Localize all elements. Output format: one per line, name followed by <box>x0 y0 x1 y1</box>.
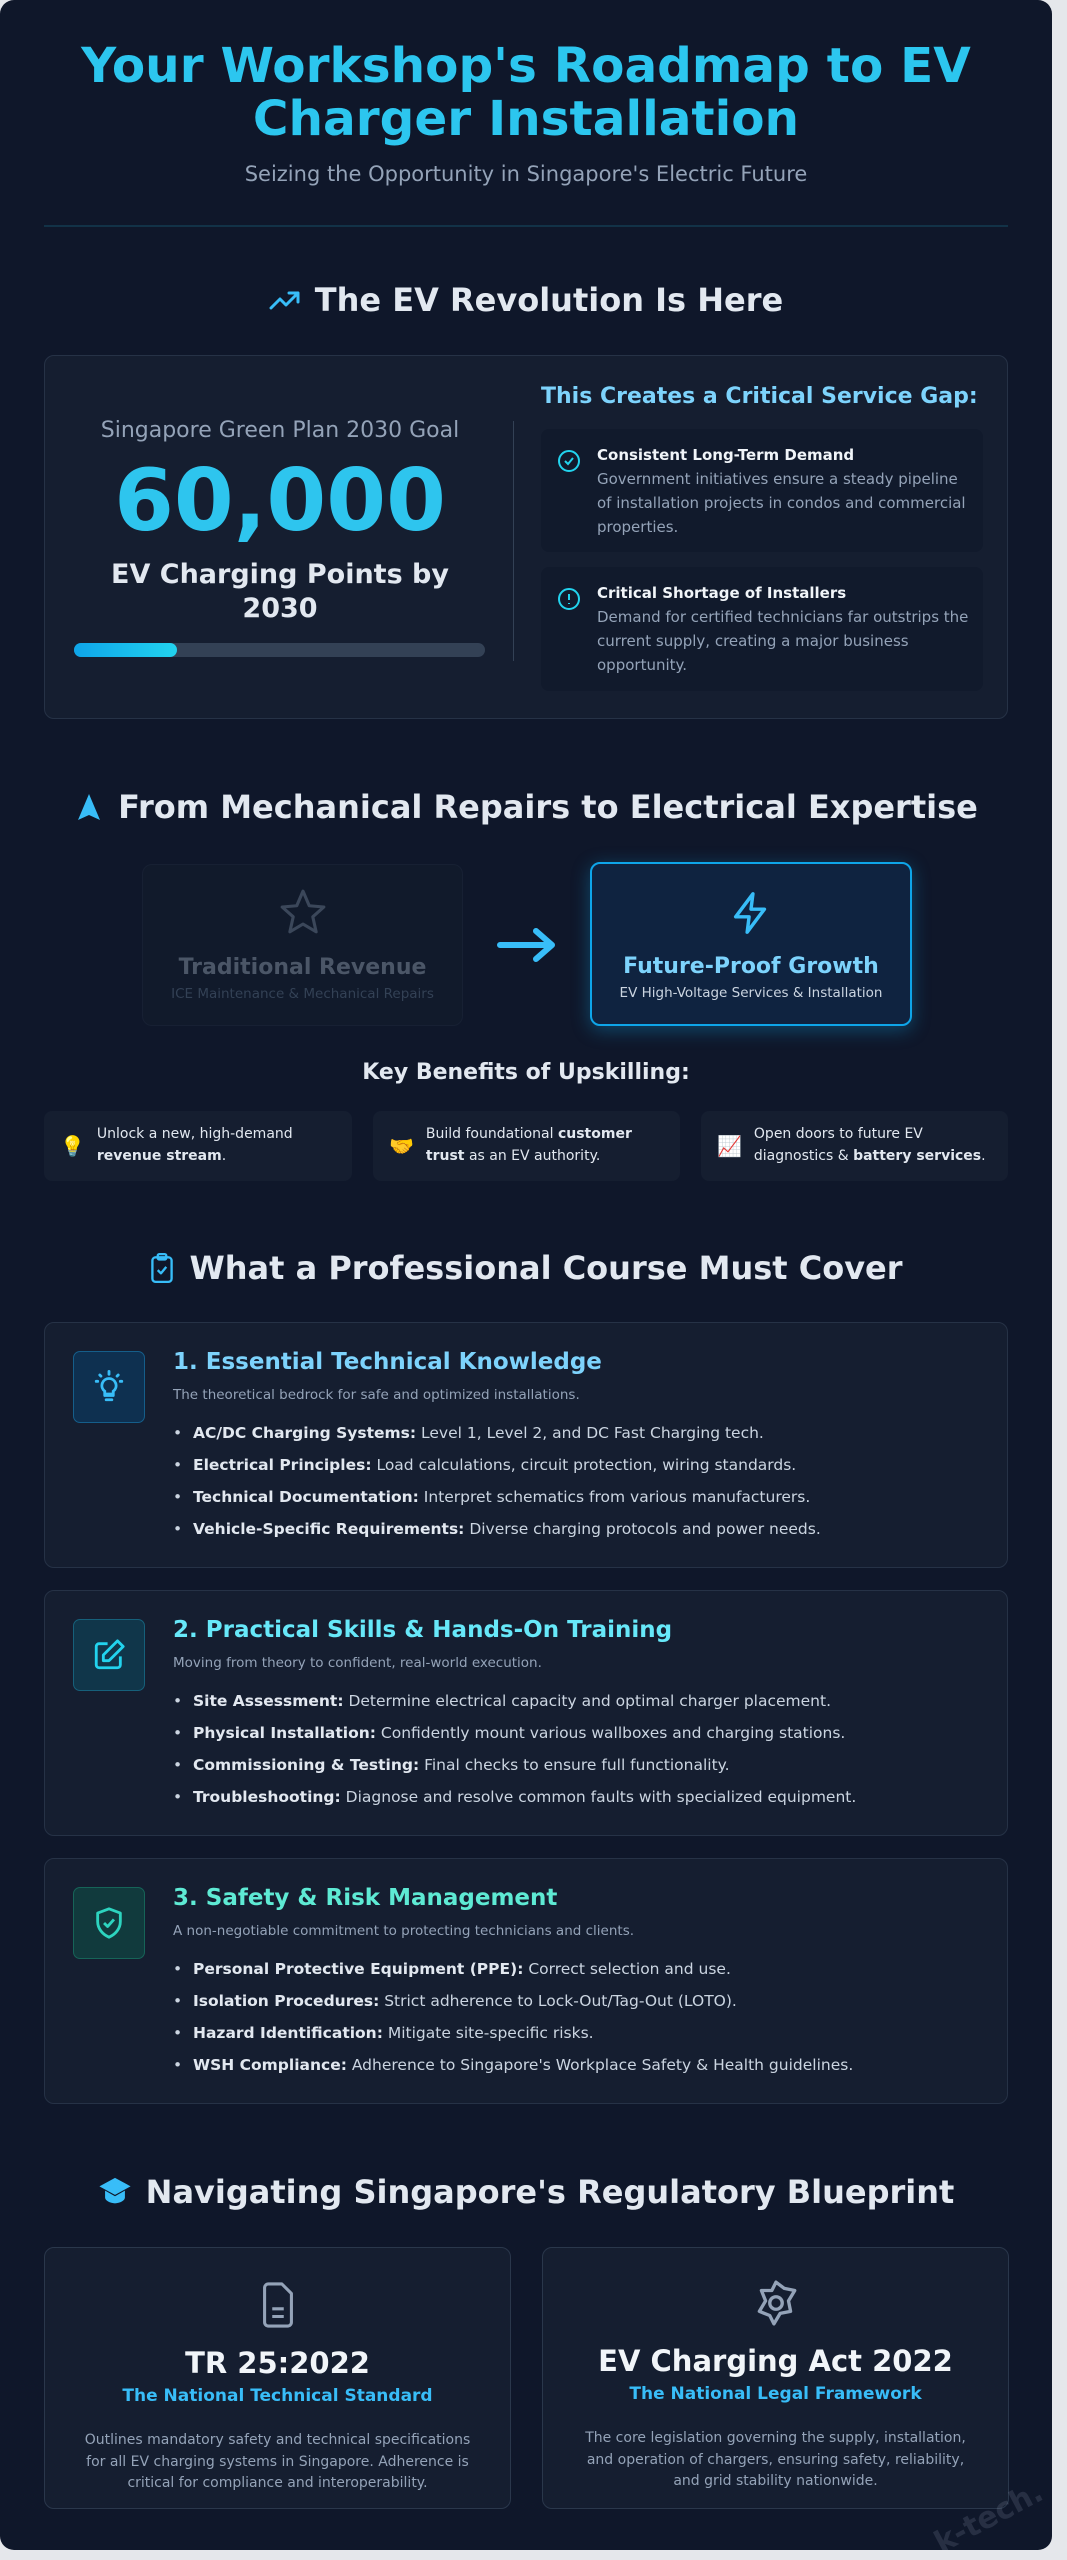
stat caption: EV Charging Points by <box>111 559 449 590</box>
card: traditional revenue: ICE Maintenance & Mechanical Repairs <box>171 986 434 1002</box>
course card 1: 1. Essential Technical Knowledge <box>173 1349 602 1375</box>
icon: document <box>263 2282 293 2328</box>
course card 2: Physical Installation: Confidently mount various wallboxes and charging stations. <box>193 1724 845 1742</box>
benefit: revenue: Unlock a new, high-demand revenue stream. <box>97 1126 293 1164</box>
benefit: trust: Build foundational customer trust as an EV authority. <box>426 1126 632 1164</box>
benefit: trust <box>373 1111 680 1181</box>
course card 2: 2. Practical Skills & Hands-On Training <box>173 1617 672 1643</box>
course card 1: AC/DC Charging Systems: Level 1, Level 2, and DC Fast Charging tech. <box>193 1424 764 1442</box>
card: traditional revenue: Traditional Revenue <box>179 955 426 980</box>
title: Charger Installation <box>253 91 799 147</box>
stat caption <box>111 559 449 624</box>
course card 1: Electrical Principles: Load calculations, circuit protection, wiring standards. <box>193 1456 796 1474</box>
stat label: Singapore Green Plan 2030 Goal <box>101 418 459 443</box>
stat caption: 2030 <box>242 593 318 624</box>
icon: bulb <box>73 1351 145 1423</box>
icon: seal <box>758 2280 796 2326</box>
reg card: TR 25 <box>44 2247 511 2509</box>
reg card: TR 25: The National Technical Standard <box>122 2386 433 2406</box>
benefit: trust: 🤝 <box>389 1134 414 1158</box>
card: traditional revenue <box>142 864 463 1026</box>
reg card: EV Charging Act: EV Charging Act 2022 <box>598 2344 953 2378</box>
arrow <box>497 928 555 962</box>
card: future-proof growth: EV High-Voltage Services & Installation <box>620 985 882 1001</box>
title <box>80 38 971 147</box>
progress bar <box>74 643 485 657</box>
benefit: revenue <box>44 1111 352 1181</box>
heading: mechanical to electrical: From Mechanical Repairs to Electrical Expertise <box>118 788 978 826</box>
course card 2: Troubleshooting: Diagnose and resolve common faults with specialized equipment. <box>193 1788 856 1806</box>
benefit: battery: 📈 <box>717 1134 742 1158</box>
course card 2 <box>44 1590 1008 1836</box>
heading: key benefits: Key Benefits of Upskilling: <box>362 1060 690 1085</box>
card: future-proof growth <box>590 862 912 1026</box>
course card 3: A non-negotiable commitment to protecting technicians and clients. <box>173 1923 634 1939</box>
course card 2: Moving from theory to confident, real-world execution. <box>173 1655 542 1671</box>
reg card: EV Charging Act: The core legislation governing the supply, installation, and operation of chargers, ensuring safety, reliability, and grid stability nationwide. <box>585 2430 966 2489</box>
subtitle: Seizing the Opportunity in Singapore's Electric Future <box>245 162 807 186</box>
reg card: EV Charging Act: The National Legal Framework <box>629 2384 922 2404</box>
reg card: EV Charging Act <box>542 2247 1009 2509</box>
benefit: revenue: 💡 <box>60 1134 85 1158</box>
course card 3: Isolation Procedures: Strict adherence to Lock-Out/Tag-Out (LOTO). <box>193 1992 737 2010</box>
service gap heading: This Creates a Critical Service Gap: <box>541 384 978 409</box>
big number: 60,000 <box>114 451 446 551</box>
benefit: battery <box>701 1111 1008 1181</box>
heading: EV revolution: The EV Revolution Is Here <box>315 281 783 319</box>
panel: EV revolution stats <box>44 355 1008 719</box>
card: demand <box>541 429 983 552</box>
course card 1: Vehicle-Specific Requirements: Diverse charging protocols and power needs. <box>193 1520 821 1538</box>
course card 1: The theoretical bedrock for safe and optimized installations. <box>173 1387 580 1403</box>
course card 1 <box>44 1322 1008 1568</box>
icon: shield <box>73 1887 145 1959</box>
card: shortage: Demand for certified technicians far outstrips the current supply, creating a major business opportunity. <box>597 608 968 674</box>
course card 1: Technical Documentation: Interpret schematics from various manufacturers. <box>193 1488 810 1506</box>
icon: edit <box>73 1619 145 1691</box>
course card 3: Hazard Identification: Mitigate site-specific risks. <box>193 2024 594 2042</box>
heading: regulatory: Navigating Singapore's Regulatory Blueprint <box>146 2173 954 2211</box>
title: Your Workshop's Roadmap to EV <box>81 38 971 94</box>
course card 3 <box>44 1858 1008 2104</box>
card: future-proof growth: Future-Proof Growth <box>623 954 879 979</box>
course card 2: Site Assessment: Determine electrical capacity and optimal charger placement. <box>193 1692 831 1710</box>
benefit: battery: Open doors to future EV diagnostics & battery services. <box>754 1126 986 1164</box>
card: demand: Consistent Long-Term Demand <box>597 446 854 464</box>
card: shortage: Critical Shortage of Installers <box>597 584 846 602</box>
reg card: TR 25: Outlines mandatory safety and technical specifications for all EV charging systems in Singapore. Adherence is critical for compliance and interoperability. <box>85 2432 470 2491</box>
heading: course: What a Professional Course Must Cover <box>189 1249 903 1287</box>
card: shortage <box>541 567 983 691</box>
reg card: TR 25: TR 25:2022 <box>185 2346 370 2380</box>
course card 3: Personal Protective Equipment (PPE): Correct selection and use. <box>193 1960 731 1978</box>
course card 3: 3. Safety & Risk Management <box>173 1885 557 1911</box>
course card 2: Commissioning & Testing: Final checks to ensure full functionality. <box>193 1756 730 1774</box>
course card 3: WSH Compliance: Adherence to Singapore's Workplace Safety & Health guidelines. <box>193 2056 853 2074</box>
card: demand: Government initiatives ensure a steady pipeline of installation projects in condos and commercial properties. <box>597 470 966 536</box>
